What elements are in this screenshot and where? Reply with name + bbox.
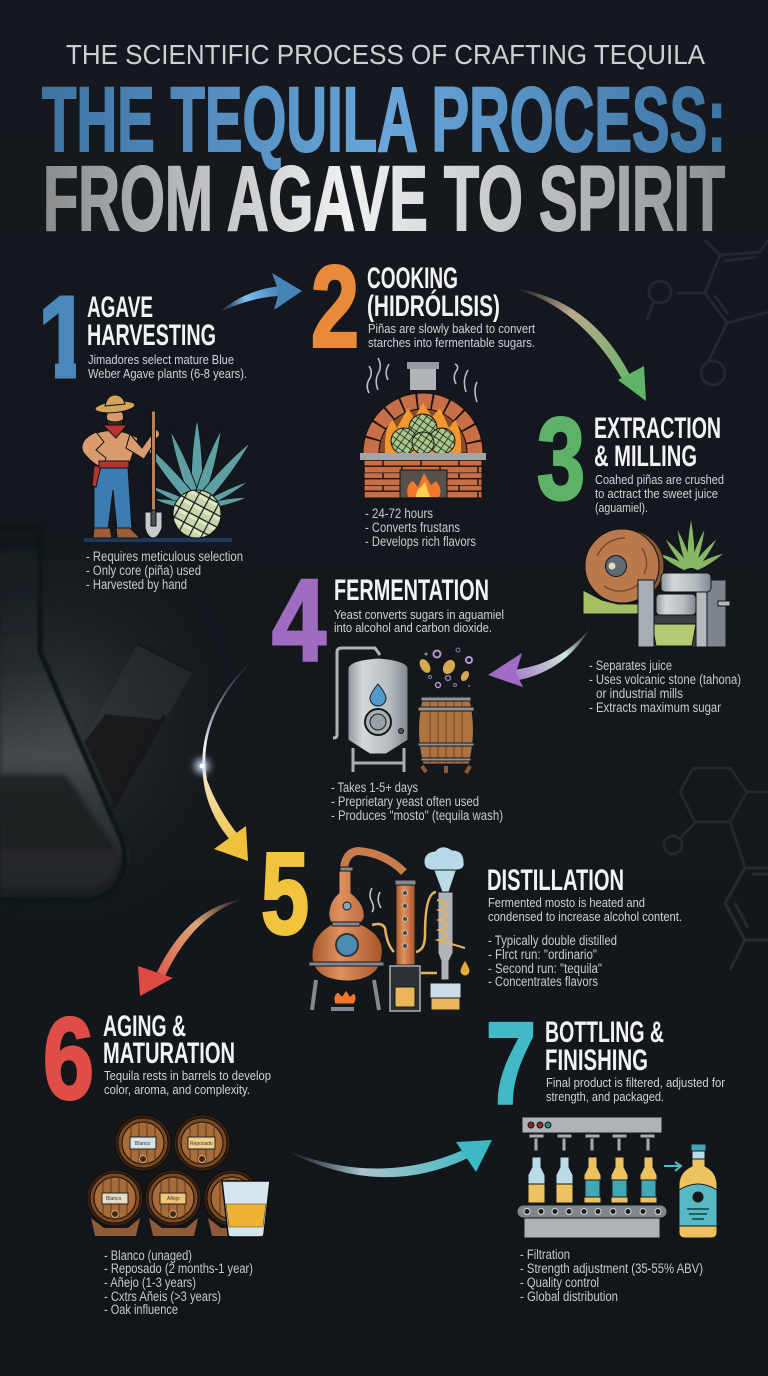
description: into alcohol and carbon dioxide. xyxy=(334,620,492,635)
description: Yeast converts sugars in aguamiel xyxy=(334,607,504,622)
step 5: distillation xyxy=(261,828,682,1011)
heading: AGAVE xyxy=(87,291,153,324)
step 1: agave harvesting xyxy=(43,296,251,592)
bullet list xyxy=(589,658,741,715)
description: (aguamiel). xyxy=(595,500,648,515)
heading xyxy=(594,412,721,473)
bullet list: - Global distribution xyxy=(520,1289,618,1304)
step 3: extraction and milling xyxy=(537,394,741,715)
icon: barrel and yeast xyxy=(417,648,474,773)
description: condensed to increase alcohol content. xyxy=(488,909,682,924)
icon: stacked barrels with glass: Blanco xyxy=(135,1141,151,1147)
bullet list: - Second run: "tequila" xyxy=(488,961,602,976)
description: Coahed piñas are crushed xyxy=(595,472,724,487)
bullet list xyxy=(365,506,476,549)
title xyxy=(42,69,726,250)
description: Final product is filtered, adjusted for xyxy=(546,1075,726,1090)
kicker line: THE SCIENTIFIC PROCESS OF CRAFTING TEQUILA xyxy=(66,39,705,70)
description xyxy=(368,321,535,350)
bullet list: - Harvested by hand xyxy=(86,577,187,592)
icon: stacked barrels with glass xyxy=(87,1115,270,1237)
heading: FERMENTATION xyxy=(334,574,489,607)
bullet list: - Strength adjustment (35-55% ABV) xyxy=(520,1261,703,1276)
step 4: fermentation xyxy=(272,556,504,823)
heading: (HIDRÓLISIS) xyxy=(367,289,500,323)
description: Fermented mosto is heated and xyxy=(488,895,645,910)
number 7: 7 xyxy=(486,998,536,1128)
heading xyxy=(103,1010,235,1070)
heading: BOTTLING & xyxy=(545,1016,664,1049)
number 4: 4 xyxy=(272,556,326,686)
number 3: 3 xyxy=(537,394,585,524)
bullet list: - Flrct run: "ordinario" xyxy=(488,947,597,962)
bullet list: - Filtration xyxy=(520,1247,570,1262)
bullet list: - Concentrates flavors xyxy=(488,974,598,989)
arrow: step 4 to 5 xyxy=(195,655,258,861)
bullet list: - Extracts maximum sugar xyxy=(589,700,721,715)
bullet list: - Requires meticulous selection xyxy=(86,549,243,564)
bullet list xyxy=(520,1247,703,1304)
icon: tahona stone and roller mill xyxy=(583,520,730,647)
description xyxy=(104,1068,271,1097)
icon: fermentation tank xyxy=(333,648,408,772)
heading: COOKING xyxy=(367,262,458,295)
arrow: step 2 to 3 xyxy=(512,288,646,401)
description xyxy=(546,1075,726,1104)
icon: copper still xyxy=(309,847,470,1011)
bullet list: - Añejo (1-3 years) xyxy=(104,1275,196,1290)
bullet list: - Cxtrs Añeis (>3 years) xyxy=(104,1289,221,1304)
description: Tequila rests in barrels to develop xyxy=(104,1068,271,1083)
heading: AGING & xyxy=(103,1010,186,1043)
bullet list: - Uses volcanic stone (tahona) xyxy=(589,672,741,687)
background: molecular hexagons xyxy=(647,240,768,970)
heading xyxy=(87,291,216,352)
bullet list: - Takes 1-5+ days xyxy=(331,780,418,795)
arrow: step 5 to 6 xyxy=(138,899,245,996)
icon: bottling line xyxy=(517,1117,717,1238)
background: glass flask and test tube xyxy=(0,510,260,940)
step 2: cooking xyxy=(311,242,535,549)
description xyxy=(595,472,724,515)
bullet list: - 24-72 hours xyxy=(365,506,433,521)
description xyxy=(488,895,682,924)
description xyxy=(88,352,247,381)
bullet list xyxy=(104,1248,253,1317)
description: Weber Agave plants (6-8 years). xyxy=(88,366,247,381)
number 1: 1 xyxy=(38,272,90,402)
bullet list: - Preprietary yeast often used xyxy=(331,794,479,809)
heading xyxy=(367,262,500,323)
heading: DISTILLATION xyxy=(487,864,624,897)
arrow: step 1 to 2 xyxy=(218,273,302,313)
icon: brick oven xyxy=(360,358,486,498)
bullet list: - Converts frustans xyxy=(365,520,460,535)
description xyxy=(334,607,504,635)
icon: jimador with shovel and agave xyxy=(82,395,255,542)
arrow: step 3 to 4 xyxy=(488,628,590,687)
description: Piñas are slowly baked to convert xyxy=(368,321,535,336)
bullet list: - Separates juice xyxy=(589,658,672,673)
description: strength, and packaged. xyxy=(546,1089,664,1104)
heading: & MILLING xyxy=(594,440,697,473)
bullet list: - Only core (piña) used xyxy=(86,563,201,578)
step 6: aging and maturation xyxy=(43,994,271,1317)
bullet list xyxy=(331,780,503,823)
icon: stacked barrels with glass: Añejo xyxy=(167,1196,180,1202)
description: Jimadores select mature Blue xyxy=(88,352,234,367)
description: color, aroma, and complexity. xyxy=(104,1082,250,1097)
bullet list: - Develops rich flavors xyxy=(365,534,476,549)
heading: MATURATION xyxy=(103,1037,235,1070)
icon: stacked barrels with glass: Blanco xyxy=(106,1196,122,1202)
number 5: 5 xyxy=(261,828,309,958)
bullet list: - Reposado (2 months-1 year) xyxy=(104,1261,253,1276)
description: to actract the sweet juice xyxy=(595,486,718,501)
heading: FINISHING xyxy=(545,1044,648,1077)
bullet list: - Oak influence xyxy=(104,1302,178,1317)
bullet list: - Typically double distilled xyxy=(488,933,617,948)
bullet list: - Blanco (unaged) xyxy=(104,1248,192,1263)
icon: stacked barrels with glass: Reposado xyxy=(190,1141,213,1147)
arrow: step 6 to 7 xyxy=(285,1140,492,1177)
description: starches into fermentable sugars. xyxy=(368,335,535,350)
heading xyxy=(545,1016,664,1077)
bullet list: - Produces "mosto" (tequila wash) xyxy=(331,808,503,823)
number 2: 2 xyxy=(311,242,359,372)
bullet list: or industrial mills xyxy=(596,686,683,701)
bullet list: - Quality control xyxy=(520,1275,599,1290)
bullet list xyxy=(86,549,243,592)
heading: HARVESTING xyxy=(87,319,216,352)
bullet list xyxy=(488,933,617,989)
number 6: 6 xyxy=(43,994,94,1124)
step 7: bottling and finishing xyxy=(486,998,726,1304)
